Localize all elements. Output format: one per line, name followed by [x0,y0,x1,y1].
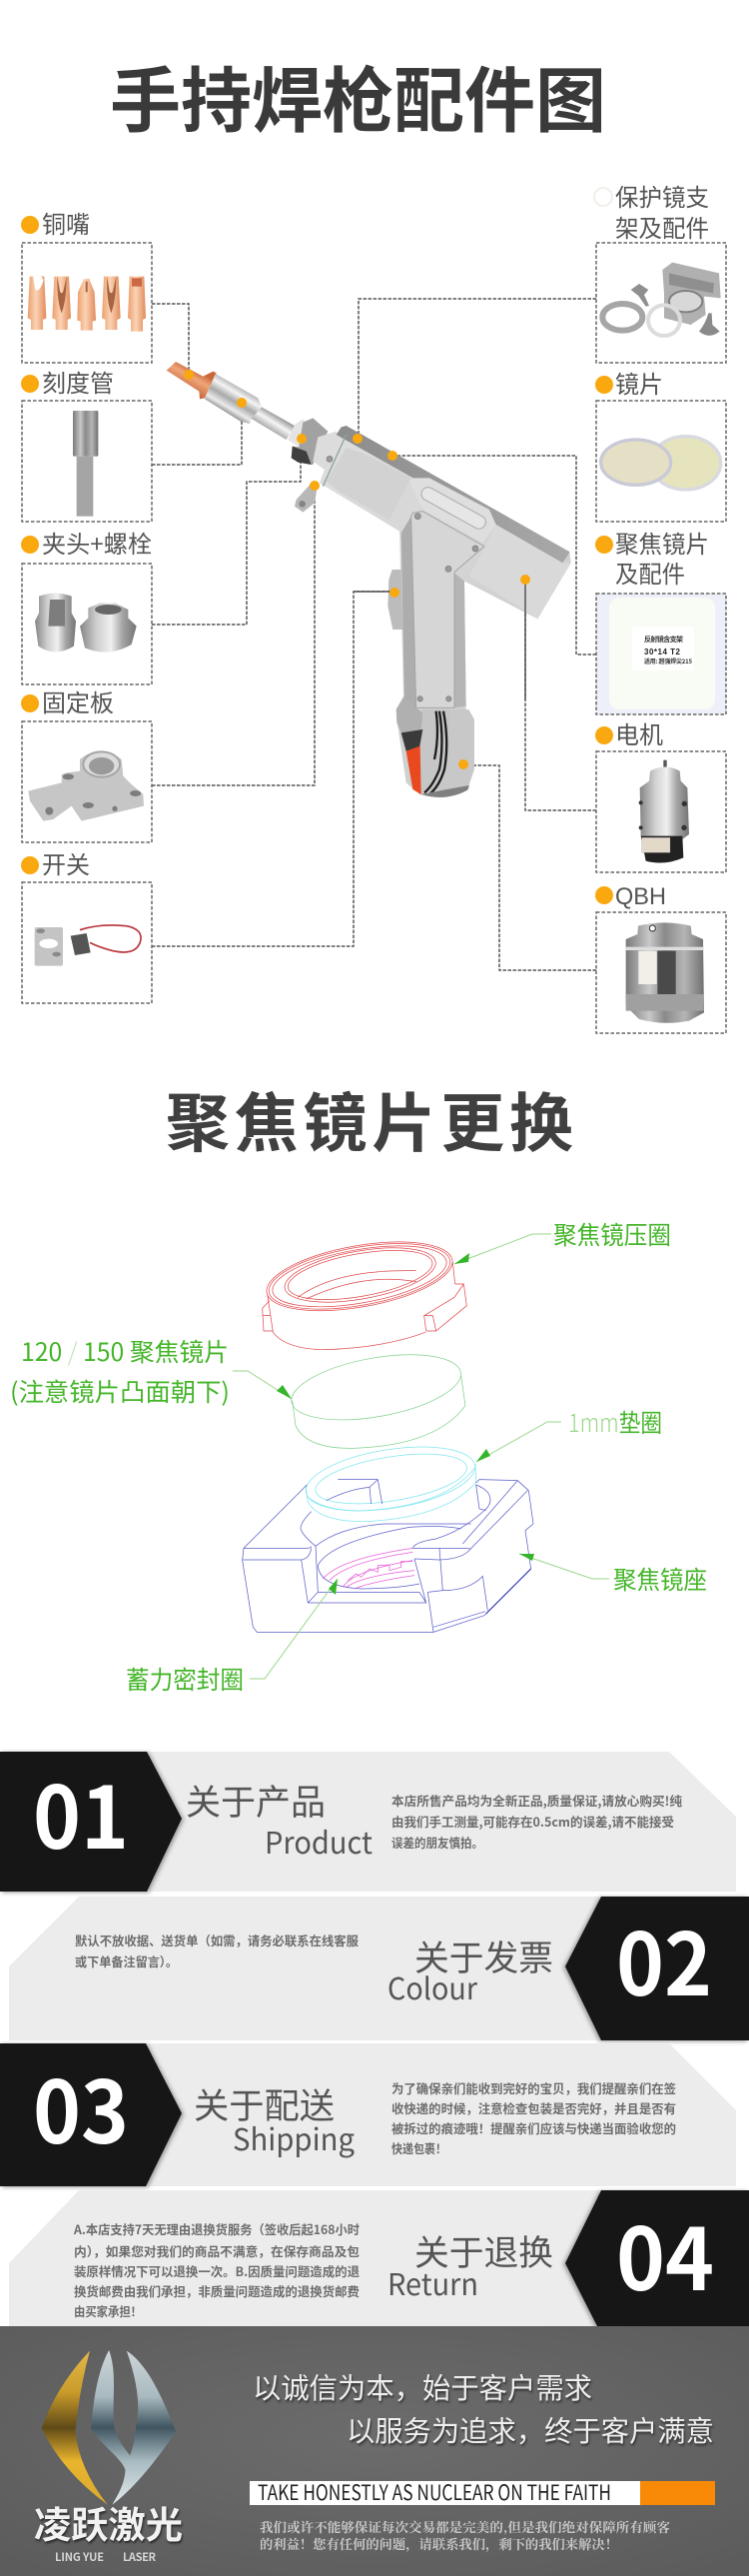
label: 聚焦镜片 [615,525,709,560]
number: 03 [33,2043,129,2168]
lever [295,482,318,513]
label: 铜嘴 [42,205,90,240]
panel: switch [21,845,152,1003]
top strip [337,426,570,563]
label: convex face note: (注意镜片凸面朝下) [10,1373,230,1409]
right sleeve [436,709,474,796]
description [75,1931,359,1970]
label: 电机 [615,715,663,750]
bottom lens [421,785,469,797]
copper nozzle [167,362,217,399]
orange cable [406,746,421,794]
label: 夹头+螺栓 [42,525,152,560]
logo emblem [42,2350,176,2505]
heading: 关于产品 [186,1775,326,1826]
label: energized seal: 蓄力密封圈 [126,1661,244,1697]
description: 收快递的时候，注意检查包装是否完好，并且是否有 [391,2098,676,2117]
lens package: 适用: 超强焊尖215 [644,656,692,665]
leader arrows [233,1234,609,1679]
brand name latin [55,2549,156,2565]
title: focus lens replacement: 聚焦镜片更换 [166,1073,573,1165]
nozzle set [28,277,146,332]
silver cylinder [313,432,342,470]
description [73,2219,360,2320]
description: A.本店支持7天无理由退换货服务（签收后起168小时 [73,2219,360,2238]
label: lens seat: 聚焦镜座 [613,1561,707,1597]
label: 及配件 [615,555,685,590]
panel: focus lens and accessories [595,525,726,714]
exploded diagram [243,1230,533,1632]
white collar [288,419,310,447]
main body [320,433,571,796]
rear panel [469,525,571,619]
english heading: Return [387,2260,478,2304]
cable gap [419,709,454,794]
slogan line 1: 以诚信为本，始于客户需求 [253,2366,592,2407]
QBH connector [626,922,704,1023]
panel: chuck and bolt [21,525,152,684]
handle side strips [401,517,416,707]
footer note: 的利益！您有任何的问题，请联系我们，剩下的我们来解决！ [260,2534,618,2553]
panel 01: product [0,1749,736,1892]
slogan line 2: 以服务为追求，终于客户满意 [347,2409,714,2450]
description: 误差的朋友慎拍。 [391,1833,483,1852]
english banner: TAKE HONESTLY AS NUCLEAR ON THE FAITH [258,2477,611,2507]
number: 04 [616,2190,714,2315]
panel: protective lens holder [594,178,726,363]
part: pressure ring [262,1230,466,1350]
english heading: Shipping [233,2115,355,2159]
description: 本店所售产品均为全新正品,质量保证,请放心购买!纯 [391,1791,682,1810]
label: focus mirror pressure ring: 聚焦镜压圈 [553,1216,671,1252]
window panel [407,478,496,543]
description: 快递包裹！ [391,2138,446,2157]
panel 02: invoice [9,1896,749,2040]
label: lens size: 120 / 150 聚焦镜片 [21,1333,229,1369]
description: 由我们手工测量,可能存在0.5cm的误差,请不能接受 [391,1812,674,1831]
lens package: 30*14 T2 [644,647,681,656]
label: 保护镜支 [615,178,709,213]
clamp nut [293,418,328,465]
description: 被拆过的痕迹哦！提醒亲们应该与快递当面验收您的 [391,2118,676,2137]
switch block [387,570,402,630]
panel: fixing plate [21,683,152,842]
panel: QBH [595,883,726,1033]
english heading: Product [265,1819,373,1863]
label [21,205,90,240]
label: 1mm washer: 1mm垫圈 [568,1404,662,1440]
connector lines [152,299,596,970]
holder parts [602,263,721,336]
lenses [601,437,721,490]
lens package [596,594,726,714]
label: 刻度管 [42,364,114,399]
heading: 关于退换 [414,2225,553,2276]
brand name latin: LING YUE [55,2549,104,2565]
description [391,2078,676,2157]
black insert [401,729,422,751]
gun connector solid segments [354,580,525,699]
left cap [396,696,422,736]
panel: motor [595,715,726,872]
part: lens seat [243,1480,533,1632]
footer note: 我们或许不能够保证每次交易都是完美的,但是我们绝对保障所有顾客 [260,2517,670,2536]
title: handheld welding gun parts: 手持焊枪配件图 [110,45,606,147]
part: energized seal [323,1548,414,1589]
label [594,178,709,244]
part: 1mm washer [302,1437,479,1522]
description: 换货邮费由我们承担，非质量问题造成的退换货邮费 [74,2281,360,2300]
label: QBH [615,883,666,910]
label: 开关 [42,845,90,880]
heading: 关于发票 [414,1931,553,1981]
motor [639,760,689,863]
switch parts [35,925,141,966]
tube [73,411,98,517]
front panel [327,448,411,520]
description: 内），如果您对我们的商品不满意，在保存商品及包 [74,2241,360,2260]
panel 03: shipping [0,2043,736,2186]
footer note [260,2517,670,2553]
glass seam [323,435,347,487]
description: 为了确保亲们能收到完好的宝贝，我们提醒亲们在签 [391,2078,676,2097]
panel: copper nozzles [21,205,152,363]
heading: 关于配送 [194,2078,335,2129]
english heading: Colour [387,1964,477,2008]
panel: lenses [595,365,726,522]
label [595,525,709,590]
label [21,845,90,880]
label: 架及配件 [615,209,709,244]
description: 默认不放收据、送货单（如需，请务必联系在线客服 [75,1931,359,1949]
panel 04: returns [9,2190,749,2326]
handle plate [411,512,484,707]
lens package: 反射镜含支架 [644,635,683,644]
number: 02 [616,1896,712,2020]
description: 或下单备注留言）。 [75,1951,178,1970]
label: 固定板 [42,683,114,718]
brand name: 凌跃激光 [34,2495,183,2549]
welding gun illustration [167,362,571,797]
black cables [424,711,446,794]
footer panel [0,2326,749,2576]
thin neck [252,407,295,440]
number: 01 [33,1749,129,1874]
description: 由买家承担！ [74,2301,142,2320]
label: 镜片 [615,365,663,400]
plate [28,751,144,821]
dark clamp block [292,447,312,465]
plate bolts [327,456,478,701]
panel: scale tube [21,364,152,522]
orange locator dots [184,370,530,769]
part: focus lens [287,1344,465,1448]
chuck parts [35,594,137,652]
description: 装原样情况下可以退换一次。B.因质量问题造成的退 [74,2261,360,2280]
barrel [205,374,295,440]
description [391,1791,682,1852]
brand name latin: LASER [123,2549,156,2565]
slot [419,485,488,532]
